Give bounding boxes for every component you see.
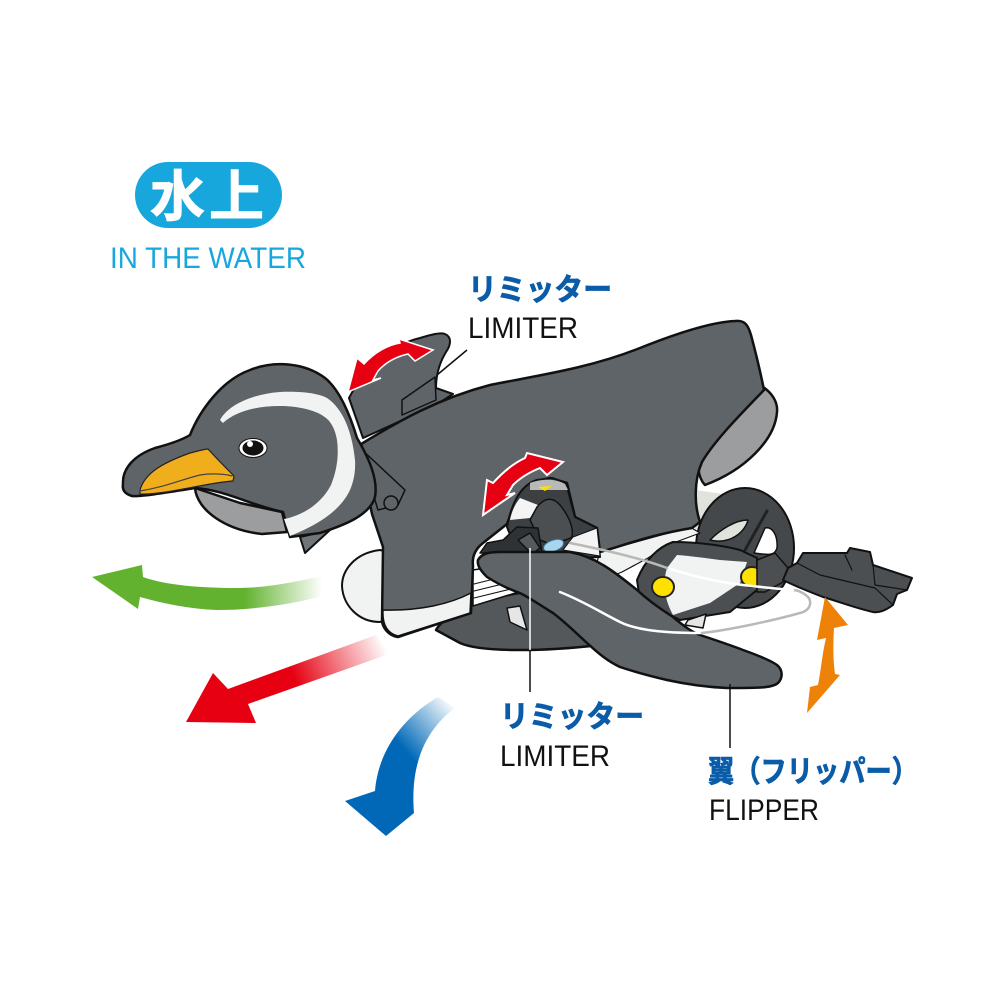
beak line	[140, 474, 232, 491]
label: flipper	[708, 756, 918, 827]
title badge: 水上: 水上	[150, 166, 268, 228]
leader line: top limiter	[437, 350, 467, 375]
head white band	[220, 392, 355, 536]
body white stripe	[383, 593, 471, 636]
penguin illustration	[123, 321, 912, 688]
leader line: lower limiter	[529, 548, 531, 650]
label: top limiter: リミッター	[468, 274, 612, 307]
red motion arrow	[186, 635, 389, 723]
mechanism struts	[473, 565, 527, 630]
label: lower limiter	[500, 701, 644, 773]
flipper	[478, 552, 782, 688]
leader line: flipper	[729, 684, 731, 748]
white side strip	[590, 527, 700, 585]
foot	[783, 548, 912, 612]
chest fin	[300, 530, 330, 553]
main body	[358, 321, 764, 637]
yellow pivot	[652, 577, 674, 597]
limiter mechanism	[480, 478, 600, 560]
label: top limiter	[468, 274, 612, 345]
blue motion arrow	[345, 697, 455, 836]
pontoon	[342, 550, 430, 622]
label: lower limiter: リミッター	[500, 701, 644, 734]
rear arm	[637, 542, 788, 628]
orange double arrow	[807, 597, 848, 713]
label: top limiter: LIMITER	[468, 312, 578, 345]
subtitle: IN THE WATER: IN THE WATER	[110, 242, 306, 275]
label: flipper: FLIPPER	[709, 794, 819, 827]
red double arrow: top limiter	[348, 339, 433, 392]
chin	[195, 488, 287, 534]
rear wheel	[695, 488, 794, 608]
collar hinge	[360, 448, 405, 510]
eye	[239, 438, 267, 458]
label: lower limiter: LIMITER	[500, 740, 610, 773]
yellow pivot	[741, 567, 763, 587]
belly	[436, 589, 605, 650]
beak	[140, 449, 234, 494]
rear tail fin	[349, 333, 453, 438]
flipper wire	[560, 543, 810, 633]
limiter housing	[402, 377, 436, 415]
tail seat	[698, 385, 777, 485]
green motion arrow	[92, 565, 322, 610]
label: flipper: 翼（フリッパー）	[708, 756, 918, 789]
head	[123, 364, 376, 537]
red double arrow: lower limiter	[483, 453, 563, 515]
